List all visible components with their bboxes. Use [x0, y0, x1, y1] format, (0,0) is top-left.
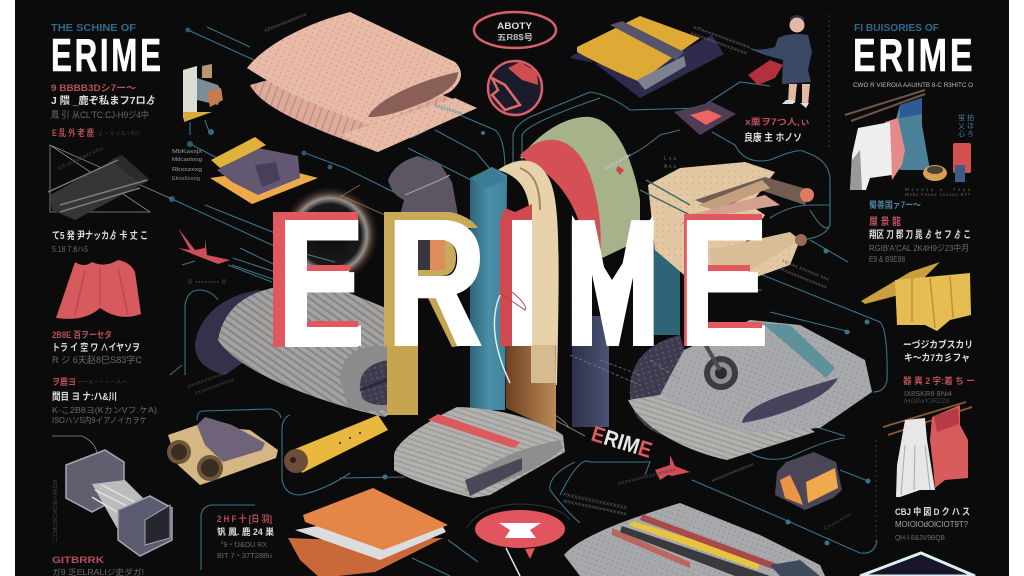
icon: purple pad — [674, 102, 736, 135]
right text block 2: キ〜カ7カ彡フャ — [904, 353, 970, 364]
icon: spool machine — [183, 64, 223, 135]
central annotation small text — [217, 513, 274, 560]
small orange box icon — [775, 452, 842, 510]
annotation: person — [690, 24, 752, 56]
right text block 4 — [895, 506, 970, 542]
annotation: left cloth — [187, 370, 236, 397]
annotation lower centre — [563, 466, 677, 518]
right header: CWO R VIEROIA AAUINTB 8-C R3HITC O — [853, 83, 973, 89]
left text block 4: K-こ2B8ヨ(KカンVフ.ケA) — [52, 406, 157, 415]
letter I: I — [503, 181, 541, 386]
left header: ERIME — [51, 30, 164, 82]
annotation lower centre: axxxxxxxxxxxxxxxxx — [563, 498, 628, 518]
icon: standing person — [748, 15, 812, 108]
panel: hexagon corner — [860, 553, 975, 576]
left text block 1: J 隈 _鹿ぞ私まフ7ロゟ — [51, 94, 156, 107]
annotation lower centre: PXXXXXXXXXXXXXXXXX — [563, 492, 628, 512]
left text block 3: R ジ 6天赵8巳S83字C — [52, 354, 142, 365]
annotation text: spool: MbKaxxjx — [172, 149, 203, 155]
icon: purple machine on orange base — [210, 137, 318, 204]
left text block 3: 2B8E 百ヲーセタ — [52, 329, 112, 340]
oval badge: ABOTY — [497, 21, 532, 31]
big title letters — [273, 180, 770, 415]
side glyphs by rack: 乂 ほ — [958, 122, 974, 130]
annotation: person: xxxxxxxxxxxxxxxxx — [690, 30, 749, 56]
right text block 2 — [903, 339, 973, 364]
left text block 1 — [51, 83, 156, 138]
annotation: pink blanket: x2xxxxxxxxxxxxx — [264, 11, 308, 33]
text: mid right label: 良康 主 ホノソ — [744, 131, 802, 144]
central annotation small text: ᅡ9・fJ&OU RX — [217, 539, 267, 549]
oval badge — [474, 12, 556, 48]
left text block 1: E 乱 外 老 鹿 — [52, 127, 94, 138]
left text block 1: .ょ・ぐくSゝ5ジ — [96, 131, 140, 137]
white thread across letters — [494, 292, 680, 385]
left bottom text: GITBRRK — [52, 555, 105, 565]
annotation: person: x2xxxxxxxxxxxxxx — [693, 24, 752, 50]
teal back of M — [612, 215, 680, 335]
right text block 3 — [903, 375, 975, 405]
annotation text: spool: Rkxxzxxg — [172, 167, 202, 173]
right header: ERIME — [853, 29, 976, 81]
oval badge: 五R8$号 — [497, 33, 533, 42]
loom with rolls icon — [167, 417, 278, 485]
annotation text: spool: Mdcaotoog — [172, 157, 202, 163]
side glyphs by rack — [958, 113, 974, 138]
right text block 3: 器 異 2 字:着 ち ー — [903, 375, 975, 386]
left text block 3 — [52, 329, 142, 365]
annotation: orange box: xxxxxxxxxxxxxxx — [711, 461, 755, 483]
panel: orange fabric stack — [288, 488, 448, 576]
annotation: beige stack: Axx — [664, 164, 676, 170]
yellow tube icon — [284, 415, 388, 473]
caption under rack: Mxkx Fxxxx xxxxxx 87? — [905, 192, 970, 197]
right text block 2: ーづジカブスカリ — [903, 339, 973, 351]
letter M: M — [564, 180, 662, 385]
left text block 4 — [52, 376, 157, 425]
left text block 1: 鳳 引 从CL'TC:CJ-H9ジ4中 — [51, 109, 149, 120]
icon: small red craft: ⊠ xxxxxxxx ⊠ — [188, 279, 226, 284]
panel: gray knit blanket right — [628, 320, 872, 460]
left text block 3: トラ イ 空 ワ ∧イヤソヲ — [52, 341, 140, 354]
right text block 1: RGIB'A'CAL 2K4H9ジ23中月 — [869, 243, 969, 253]
left text block 2: て5 発 尹ナッカゟ 卡 丈 こ — [52, 229, 148, 242]
icon: translucent prism diagram: 乂8 xxコgゐbロ kなo — [56, 145, 105, 172]
icon: small red craft — [178, 228, 275, 284]
left text block 4: ーーメー・・ー人ー — [77, 379, 127, 386]
annotation: beige stack: Hcxxx xxxxxxx xxx — [782, 258, 831, 282]
caption under rack: Mxxxxx x, 7xxx — [905, 187, 971, 192]
right text block 1 — [869, 199, 971, 264]
panel: gray rolled blanket — [195, 284, 418, 417]
annotation: beige stack: Lxx — [664, 156, 676, 162]
panel: pink knit blanket — [247, 12, 477, 152]
central annotation small text: 2 H F 十 [日 羽] — [217, 513, 272, 524]
right text block 1: 屋 景 龍 — [869, 215, 901, 228]
icon: translucent prism diagram — [48, 145, 150, 220]
panel: yellow folded cloth — [570, 16, 724, 98]
panel: beige folded stack — [640, 162, 814, 290]
icon: white and red skirts — [883, 402, 972, 497]
annotation lower centre: xxxxxxxxxxxxxxxxx — [617, 466, 677, 487]
text: mid right label — [744, 117, 810, 144]
side glyphs by rack: 心 ろ — [958, 129, 974, 138]
icon: red skirt — [56, 260, 141, 319]
right text block 1: E9 & B9E88 — [869, 255, 905, 264]
text: mid right label: x栗ヲ7つ人,ぃ — [745, 117, 810, 127]
annotation text: spool — [172, 149, 203, 182]
right text block 4: QH-I 8&3V9BQB — [895, 533, 945, 542]
navy column — [572, 316, 609, 427]
annotation: orange box: Cxxxxxxxx — [823, 511, 852, 531]
annotation: left cloth: zxxxxxxxxxxx — [194, 377, 236, 397]
right header: FI BUISORIES OF — [854, 23, 939, 34]
left text block 1: 9 BBBB3Dシ7ー〜 — [51, 83, 136, 93]
annotation: beige stack: Xxxxxxxxxxxxxxx — [780, 266, 829, 290]
icon: clothes rack — [845, 90, 971, 190]
connector lines — [50, 15, 887, 576]
left text block 4: ISOハソ5内9イアノイカヲケ — [52, 415, 147, 425]
right text block 1: 翔区 刀 郡 刀 晁 ゟ セ フ ゟ こ — [869, 228, 971, 241]
icon: red craft next to label — [655, 455, 690, 480]
left bottom text — [52, 555, 144, 576]
left text block 4: ヲ鹿ヨ — [52, 376, 76, 387]
panel: striped gray blanket — [564, 503, 825, 576]
column group: arch — [498, 117, 640, 385]
left header: THE SCHINE OF — [51, 23, 136, 34]
annotation: left cloth: zxxxxxxxxxxx — [187, 370, 229, 390]
right text block 3: IHGlAxY2RZZ9 — [904, 399, 950, 405]
panel: red oval with white icon — [467, 504, 570, 576]
small ERIME label: ERIME — [589, 421, 655, 463]
letter E (last): E — [678, 182, 770, 385]
annotation text: spool: Ekox6xsog — [172, 176, 200, 182]
central annotation small text: BIT 7・37T28Bu — [217, 551, 272, 560]
icon: glass cage machine: 二ロ8ロ8ロ4ロ8ハ48ロ9 — [53, 480, 59, 542]
caption under rack — [905, 187, 971, 197]
left text block 2: 5.18 7.8ハ5 — [52, 245, 88, 254]
letter R: R — [386, 182, 485, 386]
side glyphs by rack: 蛍 拍 — [958, 113, 974, 122]
purple cloth behind R — [388, 156, 458, 215]
annotation: orange box — [711, 461, 852, 531]
right text block 3: IX8SKR8 8Ni4 — [904, 391, 952, 398]
right text block 4: CBJ 中 図 D ク ハ ス — [895, 506, 970, 518]
annotation: beige stack — [664, 156, 831, 290]
right text block 1: 蜀善国ァ7ー〜 — [869, 199, 921, 210]
central annotation small text: 钒 鳳. 鹿 24 巣 — [217, 526, 274, 537]
left text block 2 — [52, 229, 148, 254]
icon: yellow garment — [861, 262, 971, 331]
panel: gray folded blanket center — [394, 407, 565, 498]
brown column — [506, 345, 556, 431]
right text block 4: MOIOlOdOlCIOT9T? — [895, 520, 969, 529]
left text block 4: 聞目 ヨ ナ:ハ&川 — [52, 391, 117, 403]
icon: burst ring — [280, 185, 385, 285]
circle badge — [488, 61, 542, 115]
icon: glass cage machine — [52, 436, 172, 556]
teal column — [470, 167, 507, 410]
letter E (first): E — [276, 181, 366, 386]
